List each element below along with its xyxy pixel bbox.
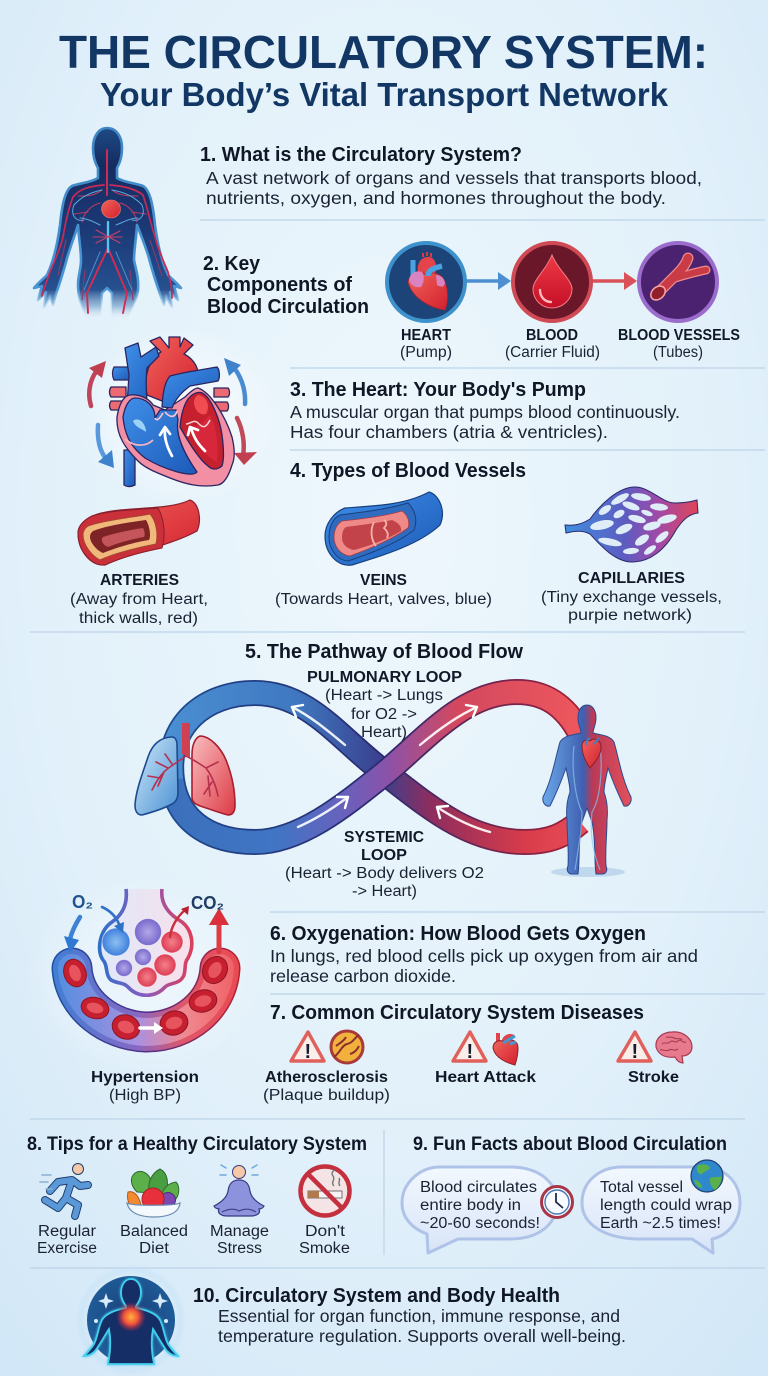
section 9 heading: fun facts: 9. Fun Facts about Blood Circulation (413, 1134, 727, 1155)
disease labels: Atherosclerosis (265, 1069, 388, 1086)
tip labels: Diet (139, 1240, 170, 1257)
pulmonary loop label (307, 669, 462, 741)
icon: capillaries (565, 487, 698, 562)
tip labels: Regular (38, 1223, 96, 1240)
callout: circulation time: entire body in (420, 1197, 521, 1214)
hypertension label: (High BP) (109, 1087, 181, 1104)
disease labels: (Plaque buildup) (263, 1087, 390, 1104)
systemic loop label: SYSTEMIC (344, 829, 424, 846)
section 10: body health: temperature regulation. Supports overall well-being. (218, 1326, 626, 1346)
component labels: (Tubes) (653, 344, 703, 361)
component labels (400, 327, 740, 361)
disease labels: Stroke (628, 1069, 679, 1086)
icon: anatomical heart with flow arrows (89, 337, 257, 486)
tip labels: Smoke (299, 1240, 350, 1257)
icon: atherosclerosis warning (291, 1031, 363, 1063)
icon: balanced diet bowl (127, 1169, 180, 1217)
component labels: HEART (401, 327, 451, 344)
callout: vessel length: length could wrap (600, 1197, 732, 1214)
disease labels: Heart Attack (435, 1069, 536, 1086)
title (59, 26, 708, 113)
section 2 heading: key components: Components of (207, 274, 352, 296)
gas arrows (70, 907, 219, 1028)
systemic loop label (285, 829, 484, 900)
icon: heart attack warning (453, 1032, 518, 1065)
vessel type labels: (Towards Heart, valves, blue) (275, 591, 492, 608)
tip labels: Exercise (37, 1240, 97, 1257)
callout: vessel length (582, 1160, 740, 1253)
vessel type labels: (Away from Heart, (70, 591, 208, 608)
arrow: heart to blood (466, 272, 511, 290)
diagram: figure-eight blood flow loops (135, 692, 631, 877)
section 6: oxygenation: 6. Oxygenation: How Blood Gets Oxygen (270, 923, 646, 945)
section 1: what is the circulatory system: 1. What is the Circulatory System? (200, 144, 522, 166)
icon: lungs (135, 723, 235, 815)
vessel type labels: thick walls, red) (79, 610, 198, 627)
pulmonary loop label: (Heart -> Lungs (325, 687, 443, 704)
tip labels: Balanced (120, 1223, 188, 1240)
icon: no smoking (300, 1166, 350, 1216)
systemic loop label: LOOP (361, 847, 407, 864)
icon: glowing body health (81, 1270, 181, 1370)
section 2 heading: key components: 2. Key (203, 253, 261, 275)
title: THE CIRCULATORY SYSTEM: (59, 26, 708, 78)
section 1: what is the circulatory system: A vast network of organs and vessels that transports blood, (206, 168, 702, 188)
icon: body with heart (543, 705, 631, 877)
vessel type labels: (Tiny exchange vessels, (541, 589, 722, 606)
pulmonary loop label: PULMONARY LOOP (307, 669, 462, 686)
icon: vein (325, 492, 442, 565)
systemic loop label: (Heart -> Body delivers O2 (285, 865, 484, 882)
section 3: the heart: 3. The Heart: Your Body's Pump (290, 379, 586, 401)
icon: running (40, 1164, 88, 1216)
section 10: body health (193, 1285, 626, 1346)
section 2 heading: key components: Blood Circulation (207, 296, 369, 318)
tip labels: Stress (217, 1240, 262, 1257)
callout: circulation time (402, 1167, 572, 1253)
callout: vessel length: Total vessel (600, 1179, 683, 1196)
vessel type labels: CAPILLARIES (578, 570, 685, 587)
section 4 heading: types of blood vessels: 4. Types of Blood Vessels (290, 460, 526, 482)
diagram: gas exchange in alveolus (60, 889, 232, 1043)
vessel type labels: VEINS (360, 572, 407, 589)
red blood cells (60, 952, 232, 1043)
icon: clock (542, 1186, 572, 1218)
tip labels (37, 1223, 350, 1257)
pulmonary loop label: for O2 -> (351, 706, 417, 723)
vessel type labels: purpie network) (568, 607, 692, 624)
disease labels (263, 1069, 679, 1104)
alveolus sac (100, 889, 192, 995)
icon: heart attack warning: ! (466, 1041, 473, 1063)
vessel type labels (70, 570, 722, 627)
hypertension label: Hypertension (91, 1069, 199, 1086)
section 2 heading: key components (203, 253, 369, 318)
icon: blood vessels (639, 243, 717, 321)
icon: blood drop (513, 243, 591, 321)
pulmonary loop label: Heart) (361, 724, 407, 741)
icon: atherosclerosis warning: ! (304, 1041, 311, 1063)
arrow: blood to vessels (592, 272, 637, 290)
section 3: the heart: Has four chambers (atria & ventricles). (290, 422, 608, 442)
section 10: body health: Essential for organ function, immune response, and (218, 1306, 620, 1326)
section 6: oxygenation (270, 923, 698, 986)
component labels: BLOOD VESSELS (618, 327, 740, 344)
section 6: oxygenation: In lungs, red blood cells pick up oxygen from air and (270, 946, 698, 966)
section 8 heading: tips: 8. Tips for a Healthy Circulatory System (27, 1134, 367, 1155)
callout: circulation time: ~20-60 seconds! (420, 1215, 540, 1232)
diagram: gas exchange in alveolus: CO₂ (191, 893, 224, 913)
component labels: BLOOD (526, 327, 578, 344)
icon: meditation (214, 1165, 264, 1216)
section 3: the heart: A muscular organ that pumps blood continuously. (290, 402, 680, 422)
section 10: body health: 10. Circulatory System and Body Health (193, 1285, 560, 1307)
blood capillary (72, 968, 220, 1032)
tip labels: Don't (305, 1223, 346, 1240)
callout: vessel length: Earth ~2.5 times! (600, 1215, 721, 1232)
hypertension label (91, 1069, 199, 1104)
section 5 heading: 5. The Pathway of Blood Flow (245, 641, 523, 663)
section 1: what is the circulatory system (200, 144, 702, 208)
section 7 heading: diseases: 7. Common Circulatory System Diseases (270, 1002, 644, 1024)
tip labels: Manage (210, 1223, 269, 1240)
component labels: (Pump) (400, 344, 452, 361)
diagram: gas exchange in alveolus: O₂ (72, 892, 93, 912)
icon: artery (78, 500, 199, 565)
icon: globe (691, 1160, 723, 1192)
icon: human circulatory figure (34, 128, 181, 317)
title: Your Body’s Vital Transport Network (100, 76, 669, 113)
callout: circulation time: Blood circulates (420, 1179, 537, 1196)
systemic loop label: -> Heart) (352, 883, 417, 900)
icon: heart component (387, 243, 465, 321)
vessel type labels: ARTERIES (100, 572, 179, 589)
component labels: (Carrier Fluid) (505, 344, 600, 361)
section 6: oxygenation: release carbon dioxide. (270, 966, 456, 986)
section 1: what is the circulatory system: nutrients, oxygen, and hormones throughout the body. (206, 188, 666, 208)
flow arrows (292, 705, 490, 832)
icon: stroke warning (618, 1032, 692, 1063)
icon: stroke warning: ! (632, 1041, 638, 1063)
section 3: the heart (290, 379, 680, 442)
